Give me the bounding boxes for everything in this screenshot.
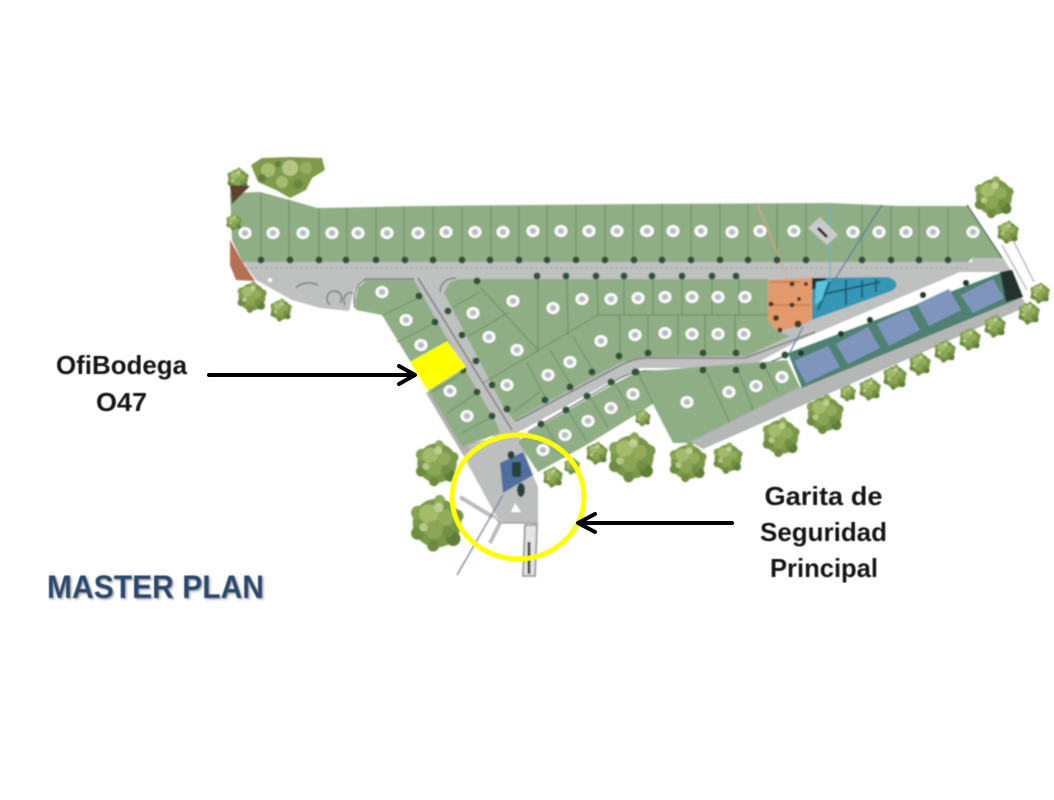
label: Garita de Seguridad Principal: Principal: [770, 553, 878, 583]
green lots: central block: [444, 278, 790, 420]
plan reference lines: [757, 203, 787, 277]
yellow circle around main gate: [452, 435, 584, 559]
brown slope at west edge: [230, 240, 255, 281]
label: OfiBodega O47: OfiBodega: [56, 350, 188, 380]
lot number markers: [238, 225, 980, 456]
tower blocks: [794, 279, 1004, 383]
cyan pool area: [812, 277, 897, 320]
street trees: small dark dots: [258, 256, 952, 428]
main gate access: [457, 451, 537, 576]
label: Garita de Seguridad Principal: Seguridad: [760, 517, 887, 547]
yellow lot OfiBodega O47: [410, 341, 466, 391]
orange amenity area: [768, 278, 812, 332]
label: OfiBodega O47: O47: [96, 387, 147, 417]
south access strip: [690, 297, 1028, 449]
perimeter trees: [226, 157, 1050, 552]
main road and plaza: [243, 258, 1012, 524]
green lots: south block: [518, 360, 800, 472]
label: OfiBodega O47: [56, 350, 188, 417]
towers zone: [788, 270, 1023, 388]
label: Garita de Seguridad Principal: [760, 481, 887, 583]
gatehouse blue roof: [500, 452, 533, 493]
site plan: [226, 157, 1050, 576]
title: MASTER PLAN: MASTER PLAN: [47, 569, 264, 605]
east edge path: [1002, 238, 1034, 290]
parking diamond: [808, 217, 838, 245]
arrow to OfiBodega lot: [209, 366, 415, 384]
green lots: west block: [355, 280, 500, 447]
green lots: top row: [230, 192, 1006, 264]
label: Garita de Seguridad Principal: Garita de: [764, 481, 882, 511]
arrow to main gate: [578, 514, 732, 532]
